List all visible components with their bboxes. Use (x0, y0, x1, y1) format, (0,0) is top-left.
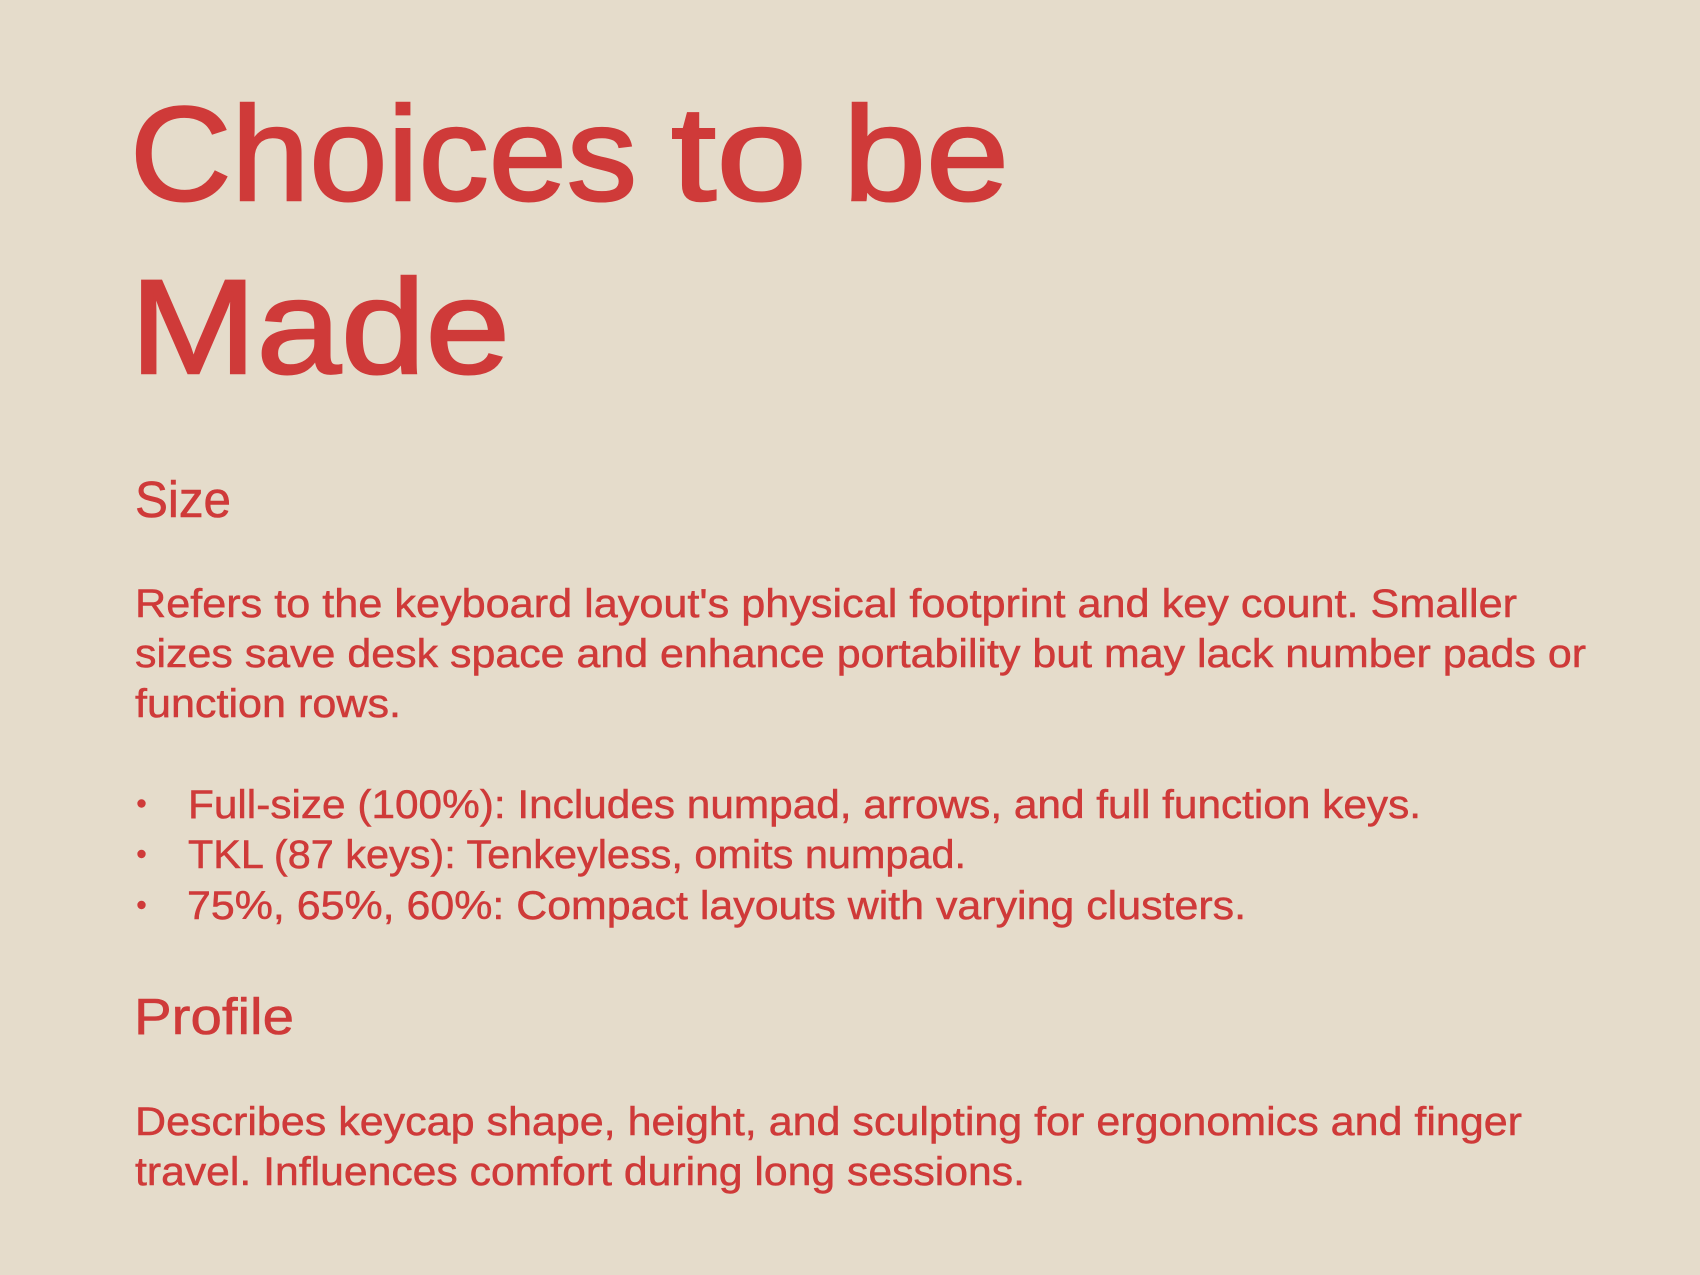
text block: size description: Refers to the keyboard layout's physical footprint and key count. Smaller (135, 582, 1517, 626)
title (130, 80, 1009, 402)
text block: size description: function rows. (135, 682, 401, 726)
text block: size description (135, 582, 1586, 726)
bullet item: full-size: Full-size (100%): Includes numpad, arrows, and full function keys. (188, 783, 1421, 827)
text block: profile description: travel. Influences comfort during long sessions. (135, 1150, 1025, 1194)
text block: profile description (135, 1100, 1522, 1194)
bullet list: keyboard sizes (137, 783, 1421, 928)
title: Made (130, 253, 510, 402)
heading: profile: Profile (134, 988, 294, 1045)
title: to (671, 80, 807, 229)
title: Choices (130, 80, 637, 229)
bullet item: TKL: TKL (87 keys): Tenkeyless, omits numpad. (188, 833, 966, 877)
title: be (843, 80, 1009, 229)
text block: profile description: Describes keycap shape, height, and sculpting for ergonomics and finger (135, 1100, 1522, 1144)
bullet item: compact layouts: 75%, 65%, 60%: Compact layouts with varying clusters. (187, 884, 1246, 928)
text block: size description: sizes save desk space and enhance portability but may lack number pads or (135, 632, 1586, 676)
heading: size: Size (135, 471, 231, 528)
